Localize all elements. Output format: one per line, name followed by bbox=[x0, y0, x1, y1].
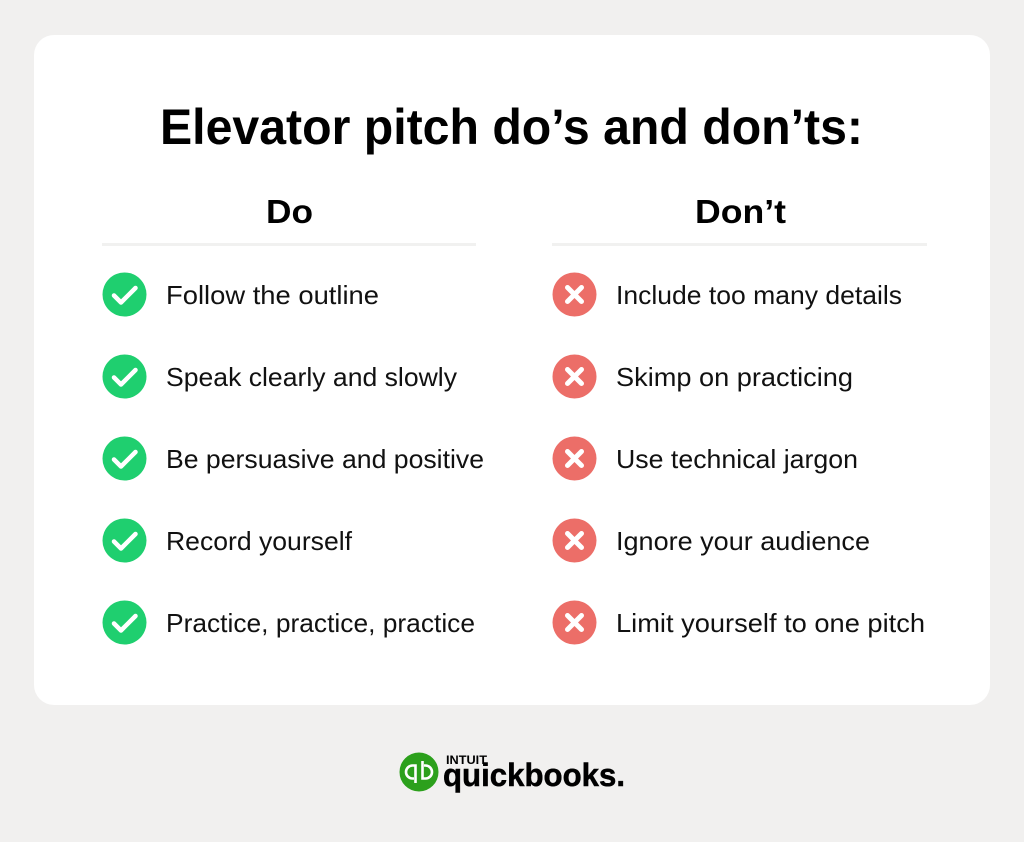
do item 2: Speak clearly and slowly bbox=[166, 362, 457, 392]
do item 1: Follow the outline bbox=[166, 280, 379, 310]
don't item 5 bbox=[552, 600, 925, 644]
do item 4 bbox=[102, 518, 353, 562]
do item 2 bbox=[102, 354, 457, 398]
don't item 1: Include too many details bbox=[616, 280, 902, 310]
don't item 3 bbox=[552, 436, 858, 480]
don't item 4: Ignore your audience bbox=[616, 526, 870, 556]
icon: quickbooks mark bbox=[400, 752, 438, 792]
heading: don't: Don’t bbox=[695, 193, 786, 230]
don't item 4 bbox=[552, 518, 870, 562]
logo: intuit quickbooks: quickbooks. bbox=[443, 757, 625, 793]
do item 3: Be persuasive and positive bbox=[166, 444, 484, 474]
don't item 2: Skimp on practicing bbox=[616, 362, 853, 392]
do item 5 bbox=[102, 600, 475, 644]
do item 5: Practice, practice, practice bbox=[166, 608, 475, 638]
do item 4: Record yourself bbox=[166, 526, 353, 556]
logo: intuit quickbooks: INTUIT bbox=[446, 753, 488, 767]
do item 1 bbox=[102, 272, 379, 316]
title: Elevator pitch do’s and don’ts: bbox=[160, 99, 863, 155]
heading: do: Do bbox=[266, 193, 313, 230]
panel: don't column bbox=[552, 193, 927, 644]
don't item 5: Limit yourself to one pitch bbox=[616, 608, 925, 638]
panel: do column bbox=[102, 193, 484, 644]
don't item 1 bbox=[552, 272, 902, 316]
don't item 3: Use technical jargon bbox=[616, 444, 858, 474]
don't item 2 bbox=[552, 354, 853, 398]
panel: white card bbox=[34, 35, 990, 705]
do item 3 bbox=[102, 436, 484, 480]
